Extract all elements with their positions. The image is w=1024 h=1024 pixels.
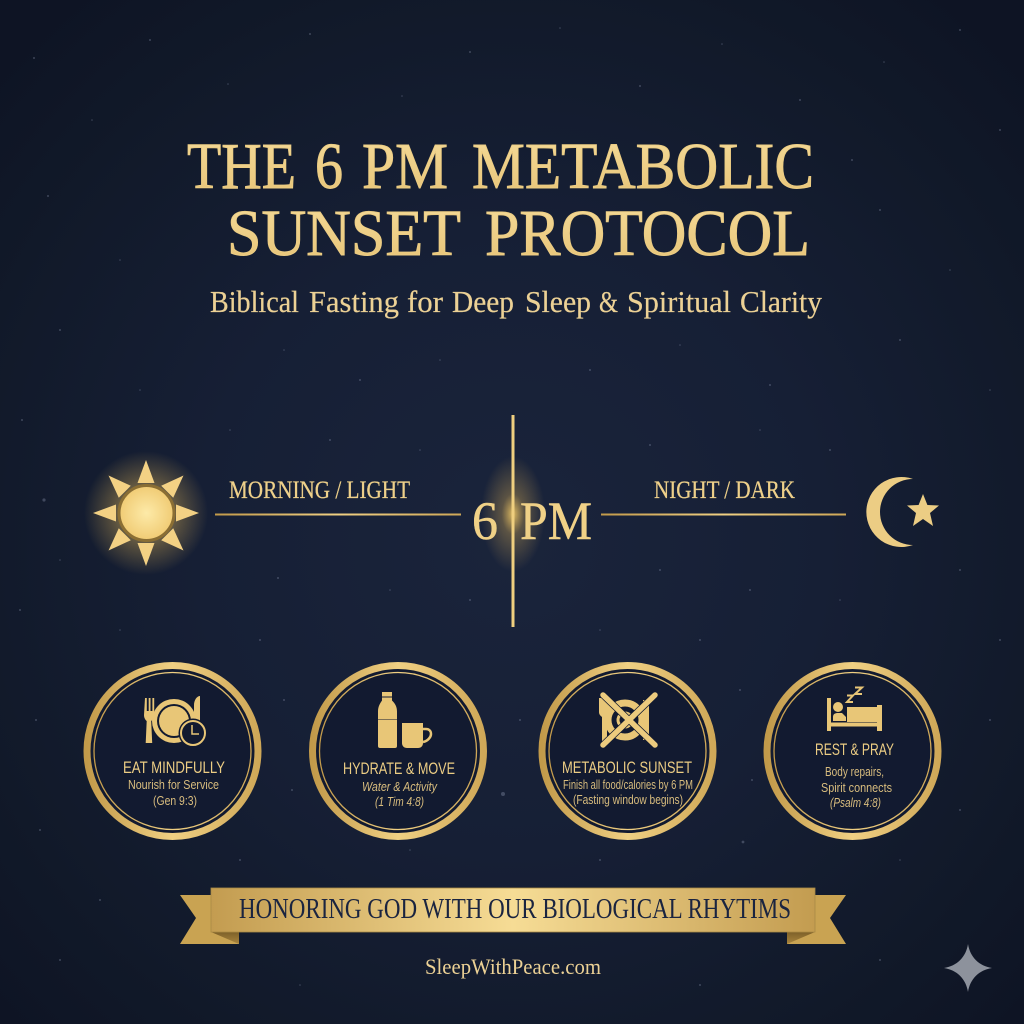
line: morning — [215, 514, 461, 516]
timeline — [84, 415, 939, 627]
reference: (1 Tim 4:8) — [375, 794, 424, 809]
panel: hydrate and move — [312, 666, 484, 836]
heading: EAT MINDFULLY — [123, 758, 225, 777]
title: METABOLIC — [472, 130, 814, 203]
label: 6: 6 — [472, 491, 498, 551]
title: PROTOCOL — [485, 197, 810, 270]
icon: sparkle mark — [944, 944, 992, 992]
label: night / dark: NIGHT / DARK — [654, 477, 795, 504]
icon: bottle and mug — [378, 692, 431, 748]
subtitle: Fasting — [309, 284, 399, 319]
panel: metabolic sunset — [542, 666, 713, 836]
icon: sun — [84, 451, 208, 575]
title: PM — [362, 130, 448, 203]
heading: METABOLIC SUNSET — [562, 758, 692, 777]
reference: (Gen 9:3) — [153, 793, 197, 808]
heading: REST & PRAY — [815, 740, 894, 759]
description: Nourish for Service — [128, 777, 219, 792]
label: morning / light: MORNING / LIGHT — [229, 477, 410, 504]
divider: 6 PM marker — [512, 415, 514, 627]
subtitle: Biblical — [210, 284, 299, 319]
title: THE — [187, 130, 296, 203]
glow: 6 PM — [481, 456, 545, 572]
title — [187, 130, 814, 270]
line: night — [601, 514, 846, 516]
icon: moon and star — [866, 477, 939, 547]
title: SUNSET — [227, 197, 461, 270]
label: PM: PM — [520, 491, 592, 551]
heading: HYDRATE & MOVE — [343, 759, 455, 778]
icon: sleeping person in bed — [827, 688, 882, 731]
title: 6 — [315, 130, 343, 203]
description: Water & Activity — [362, 779, 438, 794]
note: (Fasting window begins) — [573, 792, 683, 807]
description: Finish all food/calories by 6 PM — [563, 777, 693, 792]
subtitle: Clarity — [740, 284, 822, 319]
banner text: HONORING GOD WITH OUR BIOLOGICAL RHYTIMS — [239, 894, 791, 925]
subtitle: Deep — [452, 284, 514, 319]
subtitle: & — [599, 284, 618, 319]
subtitle: for — [407, 284, 444, 319]
panel: eat mindfully — [87, 666, 258, 836]
icon: plate, cutlery and clock — [144, 696, 208, 748]
description line 2: Spirit connects — [821, 780, 892, 795]
reference: (Psalm 4:8) — [830, 795, 881, 810]
website: SleepWithPeace.com — [425, 954, 601, 979]
panel: rest and pray — [767, 666, 938, 836]
subtitle: Sleep — [525, 284, 591, 319]
banner — [180, 888, 846, 944]
subtitle — [210, 284, 822, 319]
subtitle: Spiritual — [627, 284, 731, 319]
icon: crossed-out plate — [599, 695, 655, 745]
description line 1: Body repairs, — [825, 764, 884, 779]
